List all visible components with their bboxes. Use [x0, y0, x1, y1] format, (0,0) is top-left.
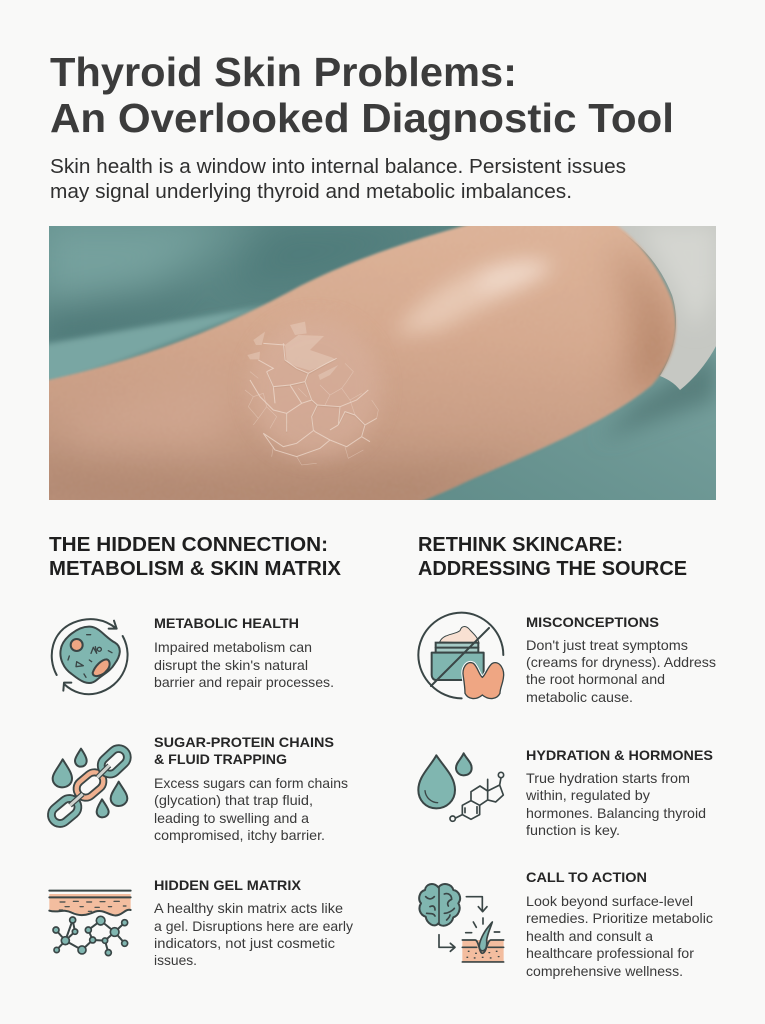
icon: crossed-out cream jar and thyroid	[418, 613, 504, 699]
icon: chain with fluid drops	[48, 745, 131, 827]
text: sugar-protein chains: leading to swelling and a	[154, 810, 309, 826]
text: hydration and hormones: function is key.	[526, 822, 620, 838]
dry patch	[245, 318, 381, 465]
text: hidden gel matrix	[154, 877, 353, 968]
title: An Overlooked Diagnostic Tool	[50, 95, 674, 141]
icon: skin layers and gel matrix	[49, 891, 131, 956]
text: sugar-protein chains: (glycation) that trap fluid,	[154, 792, 313, 808]
text: call to action: health and consult a	[526, 928, 653, 944]
text: call to action: CALL TO ACTION	[526, 869, 647, 885]
title	[50, 49, 674, 141]
subtitle	[50, 156, 626, 203]
text: hidden gel matrix: A healthy skin matrix acts like	[154, 900, 343, 916]
text: metabolic health: Impaired metabolism can	[154, 639, 312, 655]
heading: rethink skincare	[418, 534, 687, 580]
icon: water drops and hormone molecule	[418, 753, 504, 821]
text: sugar-protein chains	[154, 734, 348, 843]
text: hidden gel matrix: HIDDEN GEL MATRIX	[154, 877, 302, 893]
text: misconceptions: (creams for dryness). Address	[526, 654, 716, 670]
text: call to action: comprehensive wellness.	[526, 963, 683, 979]
text: hydration and hormones: within, regulated by	[525, 787, 650, 803]
text: hydration and hormones: hormones. Balancing thyroid	[526, 805, 706, 821]
text: misconceptions: the root hormonal and	[526, 671, 665, 687]
sleeve	[615, 226, 716, 390]
text: hydration and hormones	[525, 747, 713, 838]
text: metabolic health: disrupt the skin's natural	[154, 657, 308, 673]
icon: brain to skin follicle	[419, 884, 504, 963]
highlight	[395, 260, 555, 335]
photo: forearm with dry cracked skin patch	[40, 218, 720, 510]
text: hidden gel matrix: indicators, not just cosmetic	[154, 935, 335, 951]
text: misconceptions: metabolic cause.	[526, 689, 633, 705]
heading: hidden connection: METABOLISM & SKIN MATRIX	[49, 558, 342, 580]
icon: metabolic cell with cycle arrows	[52, 619, 128, 694]
text: metabolic health: barrier and repair processes.	[154, 674, 334, 690]
text: call to action: healthcare professional for	[526, 945, 694, 961]
arm	[40, 220, 690, 510]
subtitle: may signal underlying thyroid and metabolic imbalances.	[50, 181, 572, 203]
text: sugar-protein chains: SUGAR-PROTEIN CHAINS	[154, 734, 334, 750]
heading: rethink skincare: ADDRESSING THE SOURCE	[418, 558, 687, 580]
subtitle: Skin health is a window into internal balance. Persistent issues	[50, 156, 626, 178]
text: hydration and hormones: HYDRATION & HORMONES	[526, 747, 713, 763]
text: sugar-protein chains: Excess sugars can form chains	[154, 775, 348, 791]
title: Thyroid Skin Problems:	[50, 49, 517, 95]
heading: hidden connection	[49, 534, 342, 580]
text: call to action: Look beyond surface-level	[526, 893, 693, 909]
text: hidden gel matrix: a gel. Disruptions here are early	[154, 918, 353, 934]
text: call to action: remedies. Prioritize metabolic	[526, 910, 713, 926]
text: hidden gel matrix: issues.	[154, 952, 197, 968]
text: misconceptions: MISCONCEPTIONS	[526, 614, 659, 630]
heading: hidden connection: THE HIDDEN CONNECTION:	[49, 534, 328, 556]
text: misconceptions: Don't just treat symptoms	[526, 637, 688, 653]
text: hydration and hormones: True hydration starts from	[526, 770, 690, 786]
text: sugar-protein chains: compromised, itchy barrier.	[154, 827, 325, 843]
heading: rethink skincare: RETHINK SKINCARE:	[418, 534, 623, 556]
text: metabolic health: METABOLIC HEALTH	[154, 615, 299, 631]
text: call to action	[526, 869, 713, 979]
text: misconceptions	[526, 614, 716, 705]
text: metabolic health	[154, 615, 334, 690]
text: sugar-protein chains: & FLUID TRAPPING	[154, 751, 287, 767]
